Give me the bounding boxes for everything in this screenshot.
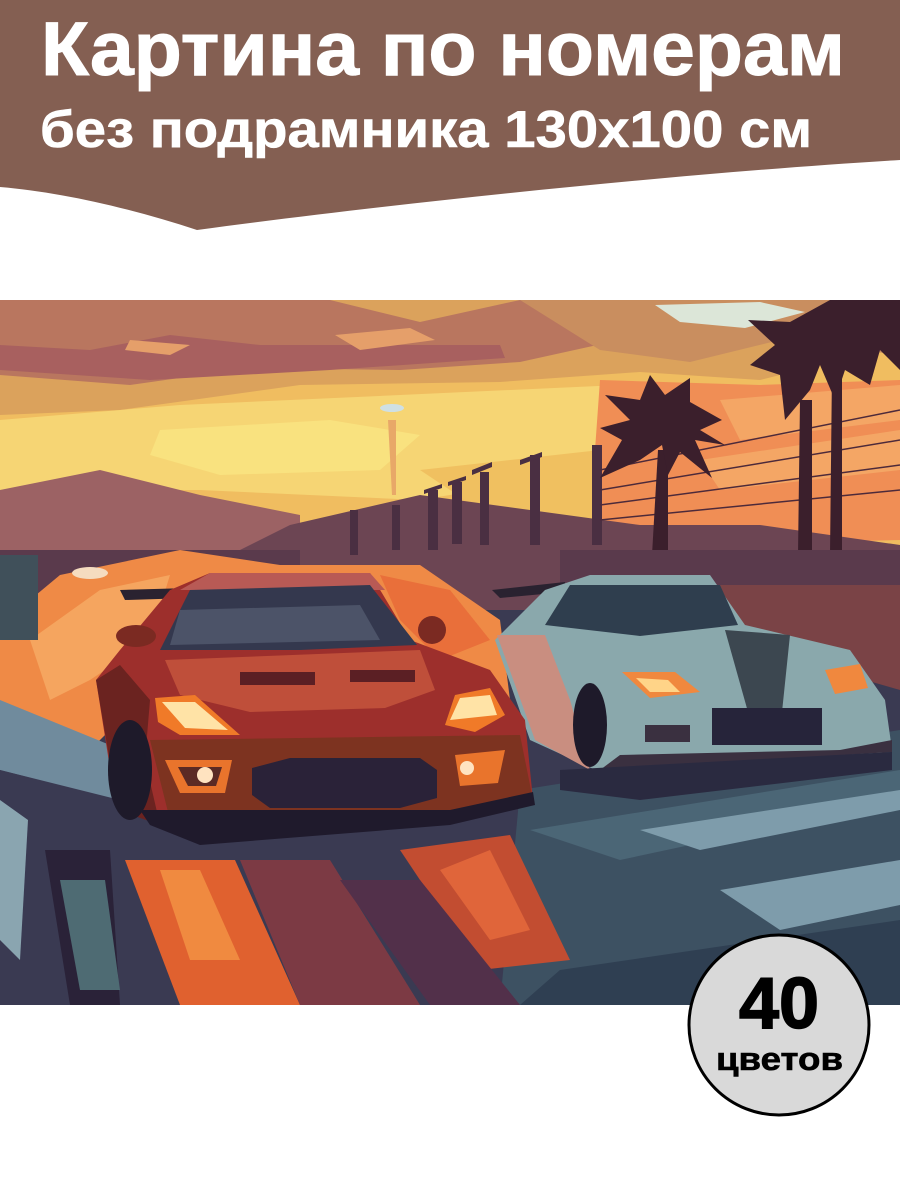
silver car <box>492 575 892 800</box>
right wall <box>560 550 900 585</box>
title: Картина по номерам <box>41 7 845 92</box>
subtitle: без подрамника 130х100 см <box>40 101 812 159</box>
badge: 40 colours <box>689 935 869 1115</box>
badge label: цветов <box>716 1041 843 1077</box>
hills and fence <box>220 404 900 610</box>
palm trees <box>600 300 900 555</box>
badge number: 40 <box>739 964 819 1044</box>
road <box>0 730 900 1005</box>
left road glow and traffic <box>0 550 510 800</box>
sky <box>0 300 900 570</box>
red car <box>96 573 535 845</box>
painting: two racing cars at sunset <box>0 300 900 1005</box>
header banner <box>0 0 900 230</box>
